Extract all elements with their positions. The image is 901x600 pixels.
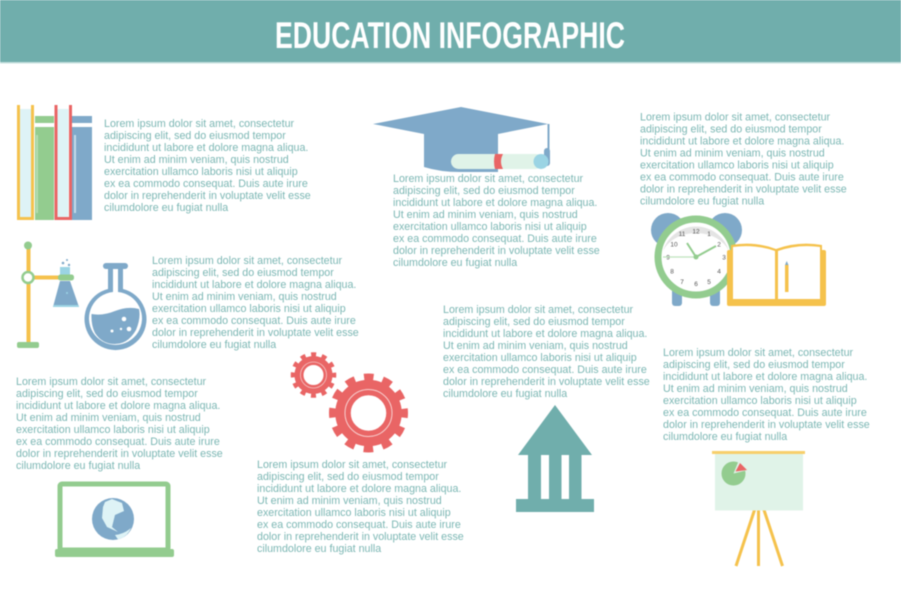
text block: building: incididunt ut labore et dolore magna aliqua.: [257, 483, 461, 495]
text block: presentation board: Lorem ipsum dolor sit amet, consectetur: [663, 347, 854, 359]
icon: round flask: [84, 263, 147, 350]
text block: clock and book: cilumdolore eu fugiat nulla: [640, 196, 764, 208]
text block: graduation: cilumdolore eu fugiat nulla: [393, 257, 517, 269]
text block: laptop: cilumdolore eu fugiat nulla: [16, 460, 140, 472]
text block: gears: cilumdolore eu fugiat nulla: [443, 388, 567, 400]
text block: building: cilumdolore eu fugiat nulla: [257, 543, 381, 555]
icon: alarm clock: 11: [679, 231, 686, 238]
icon: alarm clock: 7: [680, 279, 684, 286]
text block: flask: cilumdolore eu fugiat nulla: [152, 339, 276, 351]
icon: presentation board: [712, 451, 805, 566]
icon: graduation cap and diploma: [373, 107, 550, 172]
text block: flask: exercitation ullamco laboris nisi ut aliquip: [152, 303, 346, 315]
text block: presentation board: adipiscing elit, sed do eiusmod tempor: [663, 359, 845, 371]
icon: alarm clock: 4: [717, 268, 721, 276]
icon: alarm clock: 3: [722, 254, 726, 262]
text block: clock and book: ex ea commodo consequat. Duis aute irure: [640, 172, 844, 184]
icon: alarm clock: [651, 213, 742, 306]
text block: graduation: Ut enim ad minim veniam, quis nostrud: [393, 209, 578, 221]
text block: clock and book: Lorem ipsum dolor sit amet, consectetur: [640, 112, 831, 124]
text block: laptop: Ut enim ad minim veniam, quis nostrud: [16, 412, 201, 424]
text block: books: exercitation ullamco laboris nisi ut aliquip: [104, 166, 298, 178]
text block: clock and book: adipiscing elit, sed do eiusmod tempor: [640, 124, 822, 136]
icon: classical building: [516, 405, 594, 512]
pie chart: [722, 460, 748, 486]
text block: gears: incididunt ut labore et dolore magna aliqua.: [443, 328, 647, 340]
text block: presentation board: exercitation ullamco laboris nisi ut aliquip: [663, 395, 857, 407]
header banner: [0, 0, 901, 64]
text block: clock and book: exercitation ullamco laboris nisi ut aliquip: [640, 160, 834, 172]
text block: gears: dolor in reprehenderit in voluptate velit esse: [443, 376, 650, 388]
text block: flask: Ut enim ad minim veniam, quis nostrud: [152, 291, 337, 303]
text block: building: ex ea commodo consequat. Duis aute irure: [257, 519, 461, 531]
icon: books: [17, 105, 92, 220]
icon: alarm clock: 5: [707, 279, 711, 286]
text block: graduation: incididunt ut labore et dolore magna aliqua.: [393, 197, 597, 209]
text block: presentation board: dolor in reprehenderit in voluptate velit esse: [663, 419, 870, 431]
icon: large gear: [332, 377, 404, 449]
text block: laptop: incididunt ut labore et dolore magna aliqua.: [16, 400, 220, 412]
text block: books: adipiscing elit, sed do eiusmod tempor: [104, 130, 286, 142]
text block: graduation: ex ea commodo consequat. Duis aute irure: [393, 233, 597, 245]
text block: flask: incididunt ut labore et dolore magna aliqua.: [152, 279, 356, 291]
text block: gears: Lorem ipsum dolor sit amet, consectetur: [443, 304, 634, 316]
text block: building: Lorem ipsum dolor sit amet, consectetur: [257, 459, 448, 471]
text block: presentation board: incididunt ut labore et dolore magna aliqua.: [663, 371, 867, 383]
text block: flask: ex ea commodo consequat. Duis aute irure: [152, 315, 356, 327]
text block: clock and book: dolor in reprehenderit in voluptate velit esse: [640, 184, 847, 196]
text block: gears: Ut enim ad minim veniam, quis nostrud: [443, 340, 628, 352]
text block: laptop: dolor in reprehenderit in voluptate velit esse: [16, 448, 223, 460]
text block: books: dolor in reprehenderit in voluptate velit esse: [104, 190, 311, 202]
icon: laptop with globe: [55, 484, 174, 557]
text block: laptop: adipiscing elit, sed do eiusmod tempor: [16, 388, 198, 400]
text block: flask: adipiscing elit, sed do eiusmod tempor: [152, 267, 334, 279]
icon: alarm clock: 6: [694, 281, 698, 288]
text block: gears: ex ea commodo consequat. Duis aute irure: [443, 364, 647, 376]
text block: presentation board: Ut enim ad minim veniam, quis nostrud: [663, 383, 848, 395]
text block: gears: adipiscing elit, sed do eiusmod tempor: [443, 316, 625, 328]
text block: building: exercitation ullamco laboris nisi ut aliquip: [257, 507, 451, 519]
text block: building: adipiscing elit, sed do eiusmod tempor: [257, 471, 439, 483]
icon: open book: [727, 244, 826, 306]
text block: laptop: Lorem ipsum dolor sit amet, consectetur: [16, 376, 207, 388]
text block: graduation: exercitation ullamco laboris nisi ut aliquip: [393, 221, 587, 233]
text block: building: Ut enim ad minim veniam, quis nostrud: [257, 495, 442, 507]
icon: lab stand with small flask: [17, 242, 79, 348]
text block: graduation: Lorem ipsum dolor sit amet, consectetur: [393, 173, 584, 185]
text block: graduation: adipiscing elit, sed do eiusmod tempor: [393, 185, 575, 197]
text block: building: dolor in reprehenderit in voluptate velit esse: [257, 531, 464, 543]
text block: laptop: ex ea commodo consequat. Duis aute irure: [16, 436, 220, 448]
text block: gears: exercitation ullamco laboris nisi ut aliquip: [443, 352, 637, 364]
icon: alarm clock: 8: [670, 268, 674, 276]
text block: books: incididunt ut labore et dolore magna aliqua.: [104, 142, 308, 154]
text block: presentation board: ex ea commodo consequat. Duis aute irure: [663, 407, 867, 419]
text block: flask: dolor in reprehenderit in voluptate velit esse: [152, 327, 359, 339]
icon: small gear: [293, 354, 334, 396]
text block: laptop: exercitation ullamco laboris nisi ut aliquip: [16, 424, 210, 436]
title: EDUCATION INFOGRAPHIC: [275, 15, 625, 56]
text block: flask: Lorem ipsum dolor sit amet, consectetur: [152, 255, 343, 267]
text block: books: cilumdolore eu fugiat nulla: [104, 202, 228, 214]
text block: clock and book: Ut enim ad minim veniam, quis nostrud: [640, 148, 825, 160]
text block: books: Lorem ipsum dolor sit amet, consectetur: [104, 118, 295, 130]
text block: clock and book: incididunt ut labore et dolore magna aliqua.: [640, 136, 844, 148]
icon: alarm clock: 9: [666, 254, 670, 262]
text block: books: Ut enim ad minim veniam, quis nostrud: [104, 154, 289, 166]
icon: alarm clock: 2: [717, 242, 721, 248]
text block: presentation board: cilumdolore eu fugiat nulla: [663, 431, 787, 443]
icon: alarm clock: 12: [692, 228, 700, 236]
text block: graduation: dolor in reprehenderit in voluptate velit esse: [393, 245, 600, 257]
text block: books: ex ea commodo consequat. Duis aute irure: [104, 178, 308, 190]
icon: alarm clock: 1: [707, 231, 711, 238]
icon: alarm clock: 10: [670, 242, 678, 248]
